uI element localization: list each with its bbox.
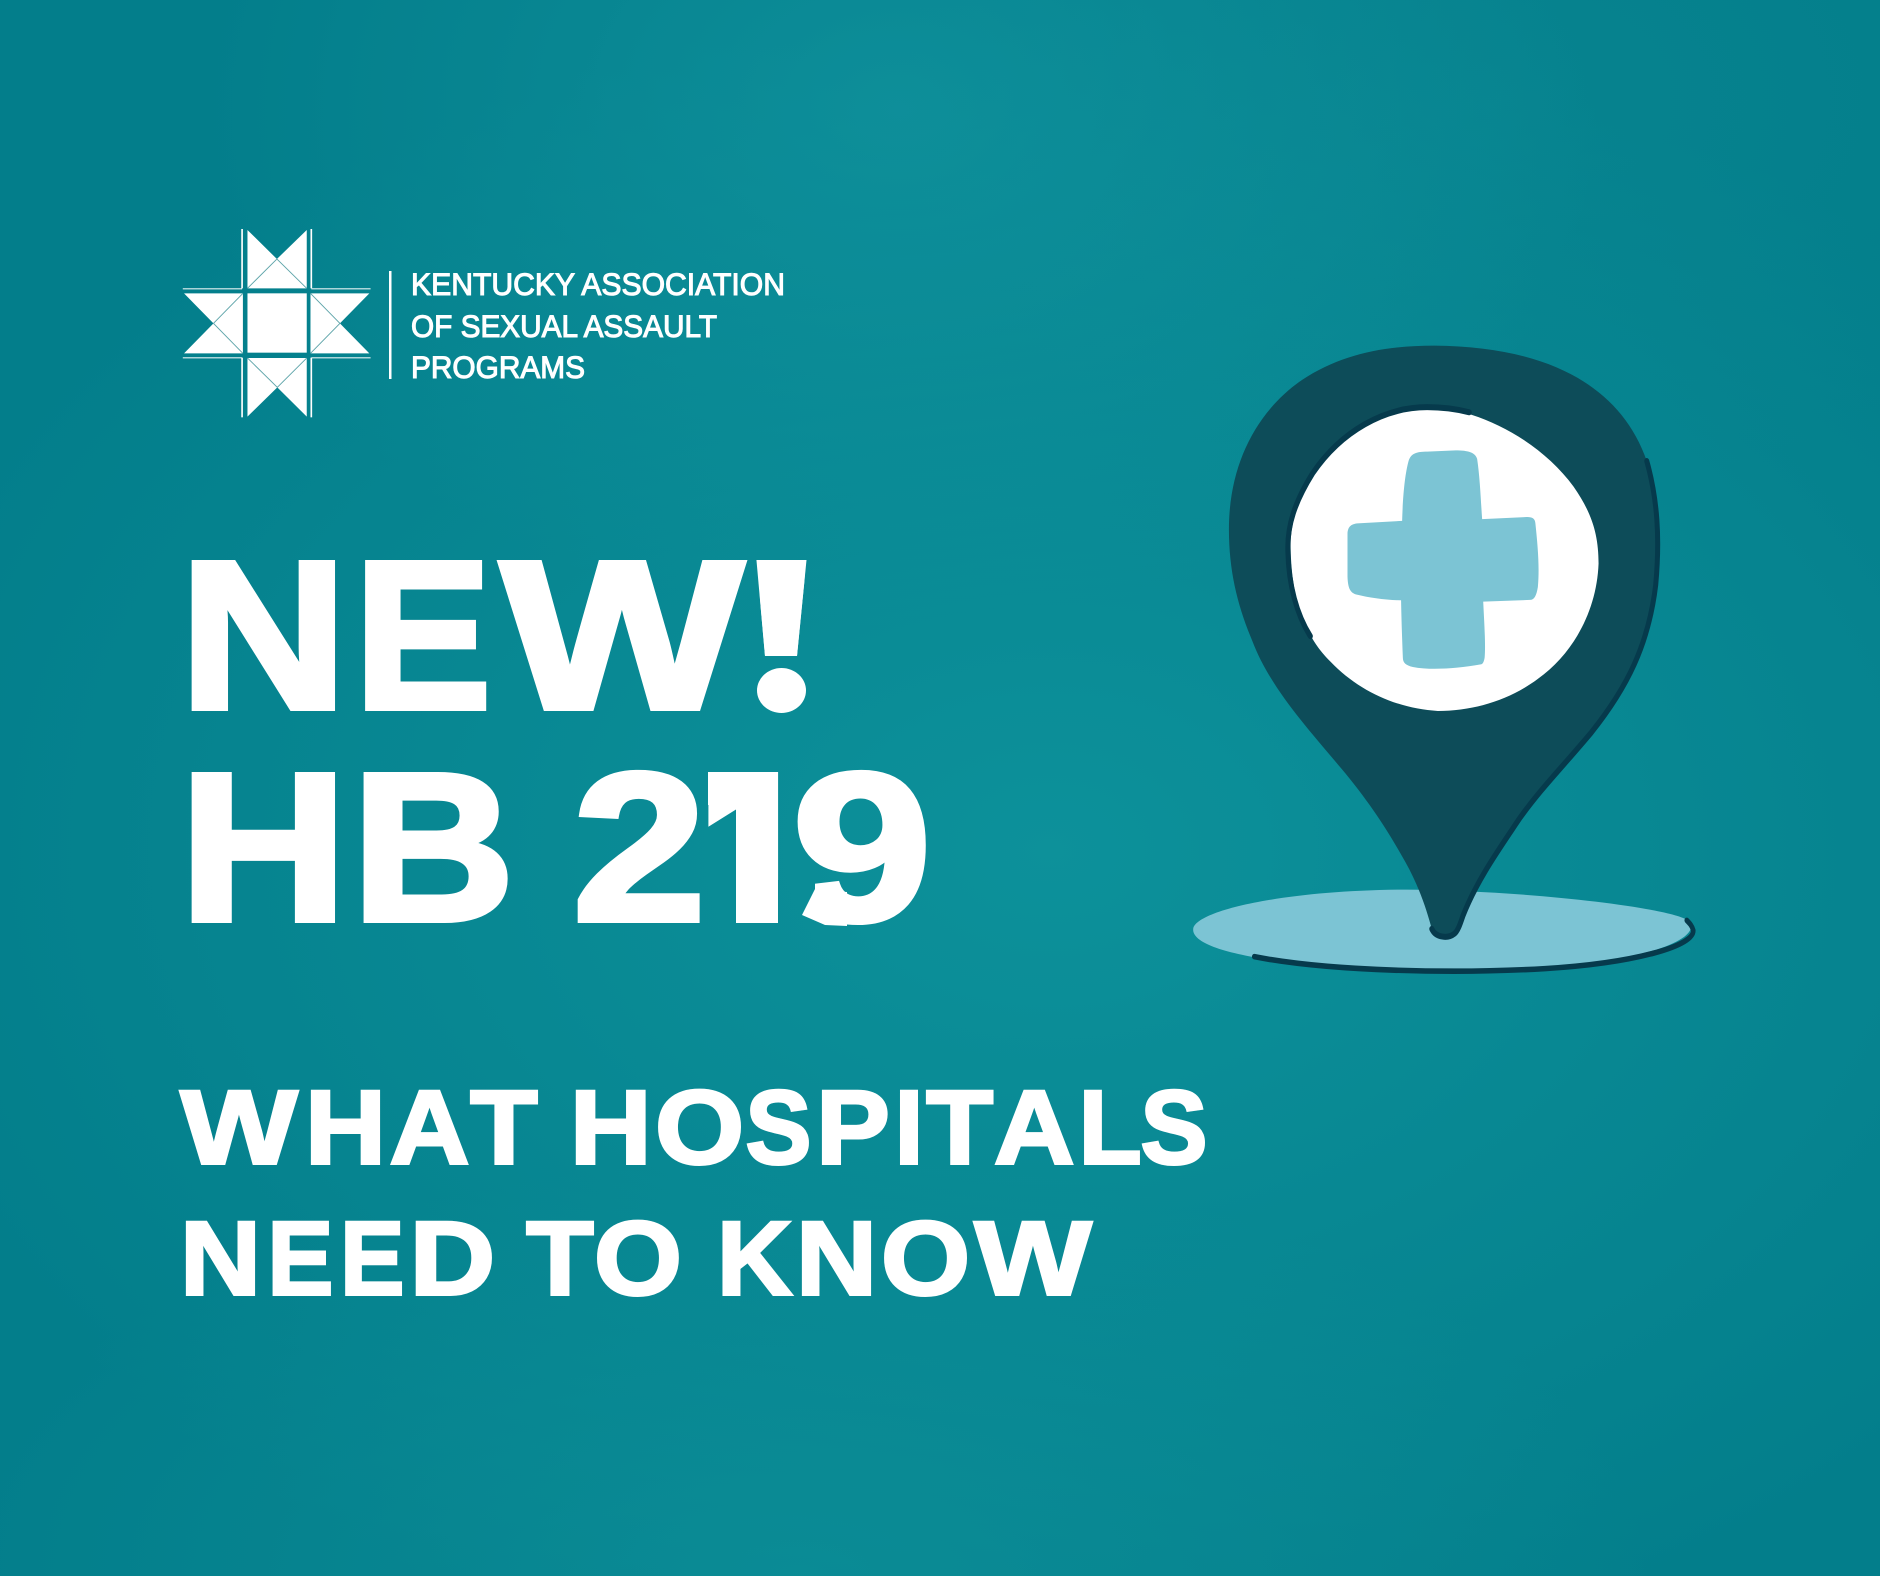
heading: NEW! bbox=[192, 560, 806, 713]
subheading: Need to know: O bbox=[594, 1200, 682, 1318]
subheading: Need to know: N bbox=[180, 1200, 261, 1318]
subheading: Need to know: K bbox=[717, 1200, 792, 1318]
subheading: Need to know: E bbox=[267, 1200, 333, 1318]
pin body bbox=[1229, 346, 1659, 939]
subheading: What hospitals: O bbox=[655, 1070, 744, 1186]
logo text: OF SEXUAL ASSAULT bbox=[411, 308, 717, 344]
subheading: What hospitals: A bbox=[994, 1070, 1074, 1186]
heading: NEW!: ! bbox=[727, 517, 837, 753]
background panel bbox=[178, 8, 1696, 1297]
ground shadow outline bbox=[1254, 920, 1693, 971]
subheading: Need to know: O bbox=[881, 1200, 970, 1318]
heading: NEW!: W bbox=[501, 517, 743, 753]
subheading: What hospitals: A bbox=[390, 1070, 470, 1186]
logo text bbox=[411, 266, 785, 385]
heading: HB 219: 9 bbox=[792, 729, 932, 965]
subheading: What hospitals: I bbox=[894, 1070, 924, 1186]
subheading: What hospitals: T bbox=[470, 1070, 538, 1186]
icon: quilt star bbox=[183, 229, 371, 417]
subheading: What hospitals: L bbox=[1079, 1070, 1142, 1186]
subheading: Need to know: W bbox=[974, 1200, 1092, 1318]
subheading: What hospitals: H bbox=[570, 1070, 652, 1186]
subheading: Need to know: E bbox=[340, 1200, 404, 1318]
logo text: KENTUCKY ASSOCIATION bbox=[411, 266, 785, 302]
heading: HB 219: B bbox=[352, 729, 515, 965]
pin body right outline bbox=[1432, 461, 1658, 937]
heading: HB 219: 1 bbox=[697, 729, 814, 965]
subheading: What hospitals: T bbox=[926, 1070, 993, 1186]
white disc outline bbox=[1288, 407, 1469, 636]
pin ground shadow bbox=[1193, 890, 1691, 969]
subheading: What hospitals: S bbox=[1140, 1070, 1208, 1186]
subheading: Need to know: N bbox=[796, 1200, 877, 1318]
white disc bbox=[1291, 408, 1599, 711]
subheading: What hospitals: H bbox=[305, 1070, 386, 1186]
heading: HB 219: 2 bbox=[573, 729, 706, 965]
subheading: Need to know: T bbox=[526, 1200, 594, 1318]
subheading: What hospitals: W bbox=[180, 1070, 298, 1186]
subheading: What hospitals: S bbox=[746, 1070, 811, 1186]
medical cross bbox=[1347, 450, 1539, 669]
heading: HB 219: H bbox=[179, 729, 347, 965]
heading: NEW!: N bbox=[179, 517, 347, 753]
logo text: PROGRAMS bbox=[411, 349, 585, 385]
logo divider bbox=[389, 271, 392, 379]
icon: map pin with medical cross bbox=[1193, 346, 1693, 971]
heading: HB 219 bbox=[192, 770, 926, 926]
subheading: What hospitals: P bbox=[816, 1070, 890, 1186]
subheading: Need to know: D bbox=[410, 1200, 495, 1318]
logo: Kentucky Association of Sexual Assault Programs bbox=[183, 229, 785, 417]
heading: NEW!: E bbox=[354, 517, 491, 753]
